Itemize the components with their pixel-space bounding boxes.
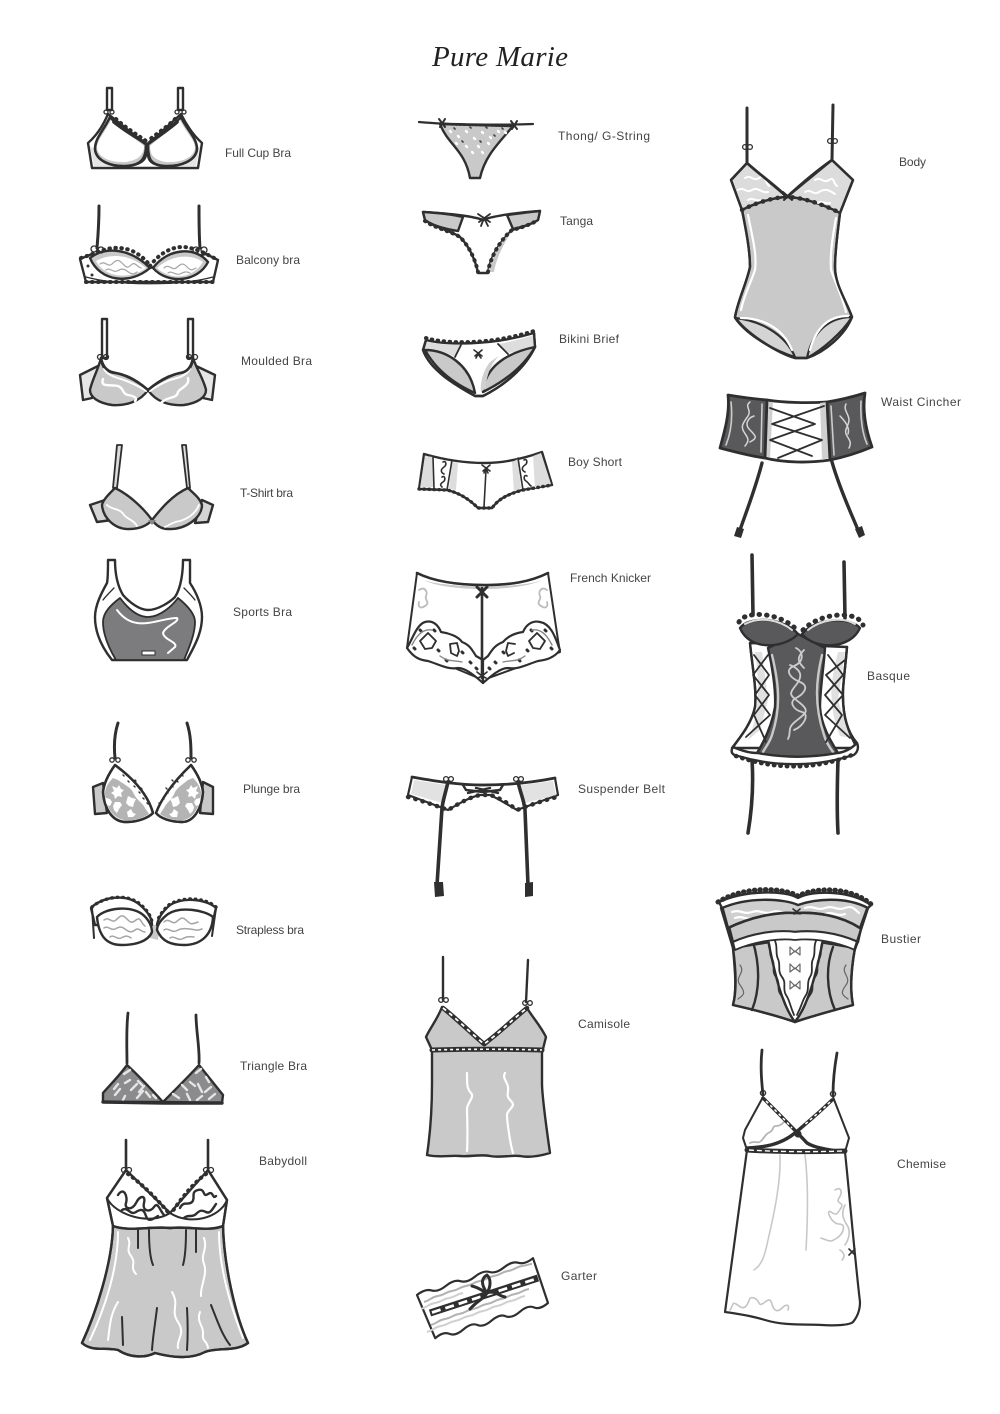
drawing: moulded bra (80, 319, 215, 405)
drawing: bustier (718, 890, 872, 1022)
garment: moulded bra (80, 319, 312, 405)
label: tanga: Tanga (560, 214, 593, 228)
label: thong: Thong/ G-String (558, 129, 650, 143)
garment: bikini brief (423, 331, 620, 396)
drawing: basque (732, 555, 863, 833)
garment: suspender belt (408, 777, 666, 897)
drawing: strapless bra (91, 897, 216, 945)
drawing: body (731, 105, 853, 358)
garment: balcony bra (80, 206, 300, 284)
label: boy short: Boy Short (568, 455, 623, 469)
drawing: chemise (725, 1050, 860, 1325)
garment: strapless bra (91, 897, 304, 945)
drawing: camisole (426, 957, 550, 1157)
garment: camisole (426, 957, 630, 1157)
drawing: triangle bra (103, 1013, 223, 1103)
garment: waist cincher (720, 393, 961, 538)
title: Pure Marie (431, 41, 568, 73)
garment: french knicker (407, 571, 651, 683)
drawing: plunge bra (93, 723, 213, 822)
garment: full cup bra (88, 88, 291, 168)
label: waist cincher: Waist Cincher (881, 395, 961, 409)
label: t-shirt bra: T-Shirt bra (240, 486, 293, 500)
garment: tanga (423, 211, 593, 273)
garment: t-shirt bra (90, 445, 293, 529)
label: french knicker: French Knicker (570, 571, 651, 585)
label: balcony bra: Balcony bra (236, 253, 300, 267)
garment: boy short (419, 452, 623, 508)
drawing: full cup bra (88, 88, 202, 168)
drawing: waist cincher (720, 393, 872, 538)
drawing: french knicker (407, 573, 560, 683)
garment: sports bra (95, 560, 292, 660)
label: sports bra: Sports Bra (233, 605, 292, 619)
garment: bustier (718, 890, 921, 1022)
label: bustier: Bustier (881, 932, 921, 946)
label: babydoll: Babydoll (259, 1154, 307, 1168)
garment: thong (419, 119, 650, 178)
drawing: boy short (419, 452, 552, 508)
drawing: t-shirt bra (90, 445, 213, 529)
label: basque: Basque (867, 669, 910, 683)
garment: chemise (725, 1050, 946, 1325)
label: moulded bra: Moulded Bra (241, 354, 312, 368)
label: strapless bra: Strapless bra (236, 923, 304, 937)
drawing: garter (417, 1258, 548, 1338)
label: bikini brief: Bikini Brief (559, 332, 620, 346)
label: body: Body (899, 155, 926, 169)
label: suspender belt: Suspender Belt (578, 782, 666, 796)
drawing: tanga (423, 211, 540, 273)
label: garter: Garter (561, 1269, 597, 1283)
drawing: suspender belt (408, 777, 558, 897)
drawing: sports bra (95, 560, 202, 660)
drawing: balcony bra (80, 206, 218, 284)
label: triangle bra: Triangle Bra (240, 1059, 307, 1073)
garment: basque (732, 555, 910, 833)
label: plunge bra: Plunge bra (243, 782, 300, 796)
garment: body (731, 105, 926, 358)
label: full cup bra: Full Cup Bra (225, 146, 291, 160)
garment: garter (417, 1258, 597, 1338)
garment: babydoll (82, 1140, 307, 1357)
label: chemise: Chemise (897, 1157, 946, 1171)
garment: plunge bra (93, 723, 300, 822)
drawing: bikini brief (423, 331, 535, 396)
drawing: babydoll (82, 1140, 248, 1357)
drawing: thong (419, 119, 533, 178)
label: camisole: Camisole (578, 1017, 630, 1031)
garment: triangle bra (103, 1013, 307, 1103)
